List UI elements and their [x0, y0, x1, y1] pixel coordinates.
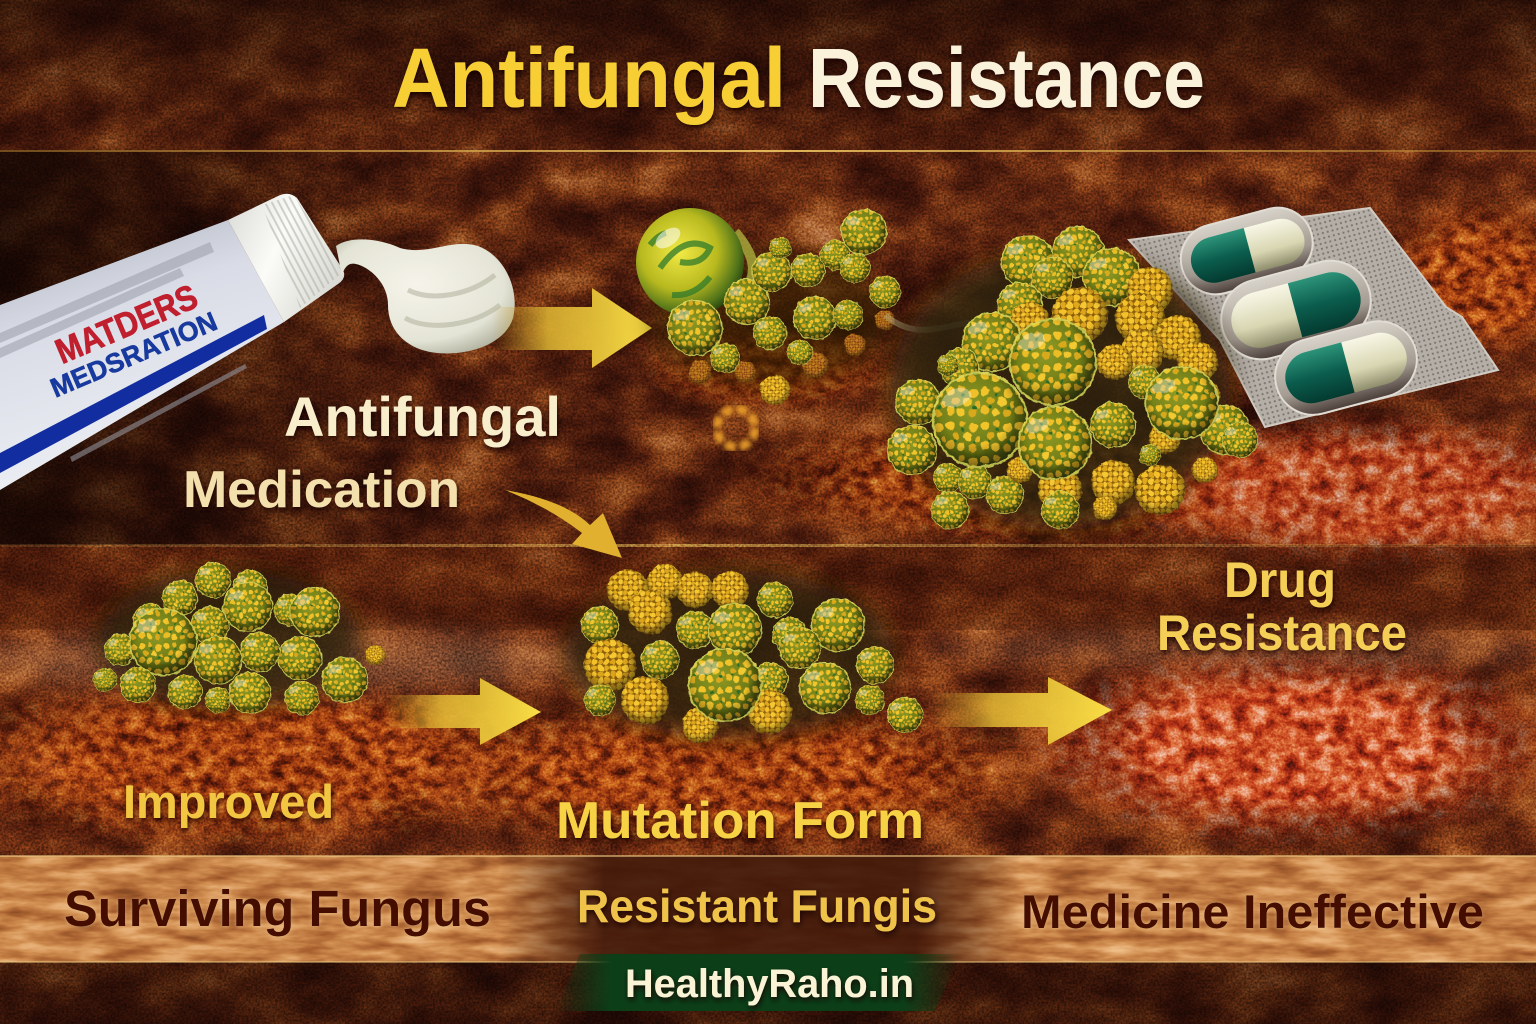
fungus cluster mutation — [565, 564, 923, 743]
capsule two — [1212, 252, 1380, 368]
label: mutation form: Mutation Form — [556, 792, 924, 850]
strip label: medicine ineffective: Medicine Ineffective — [1021, 885, 1484, 938]
fungus cluster surviving — [93, 562, 385, 715]
tube fine print — [0, 242, 247, 462]
tube blue stripe — [0, 315, 267, 473]
footer website: HealthyRaho.in — [625, 962, 914, 1006]
capsule three — [1267, 313, 1425, 423]
strip label: surviving fungus: Surviving Fungus — [64, 880, 491, 937]
tube cap — [228, 194, 344, 322]
title — [392, 31, 1205, 125]
bottom strip — [0, 855, 1536, 963]
title divider line — [0, 150, 1536, 152]
label: drug resistance: Resistance — [1157, 605, 1407, 661]
icon: medication tube — [0, 194, 344, 490]
label: antifungal medication: Medication — [183, 461, 460, 519]
label: improved: Improved — [123, 775, 334, 828]
footer badge — [555, 954, 960, 1011]
strip label: resistant fungis: Resistant Fungis — [577, 880, 937, 932]
label: antifungal medication — [183, 385, 561, 519]
arrow: tube to fungus — [492, 288, 652, 368]
big green spore sphere — [636, 208, 753, 316]
label: drug resistance — [1157, 552, 1407, 661]
glowing ring spore — [717, 409, 755, 447]
curved arrow: medication to mutation — [505, 490, 622, 558]
title: Resistance — [808, 31, 1205, 125]
capsule one — [1173, 200, 1321, 302]
cream squeeze — [336, 239, 515, 353]
label: antifungal medication: Antifungal — [284, 385, 561, 448]
label: drug resistance: Drug — [1224, 552, 1336, 608]
icon: medication tube: MEDSRATION — [46, 306, 222, 403]
arrow: surviving to mutation — [385, 678, 541, 745]
blister pack — [1129, 200, 1498, 427]
title: Antifungal — [392, 31, 786, 125]
fungus cluster small top — [636, 208, 901, 405]
fungus cluster large — [885, 226, 1258, 530]
arrow: mutation to drug resistance — [930, 677, 1112, 745]
tube brand text: MATDERS — [50, 277, 203, 372]
